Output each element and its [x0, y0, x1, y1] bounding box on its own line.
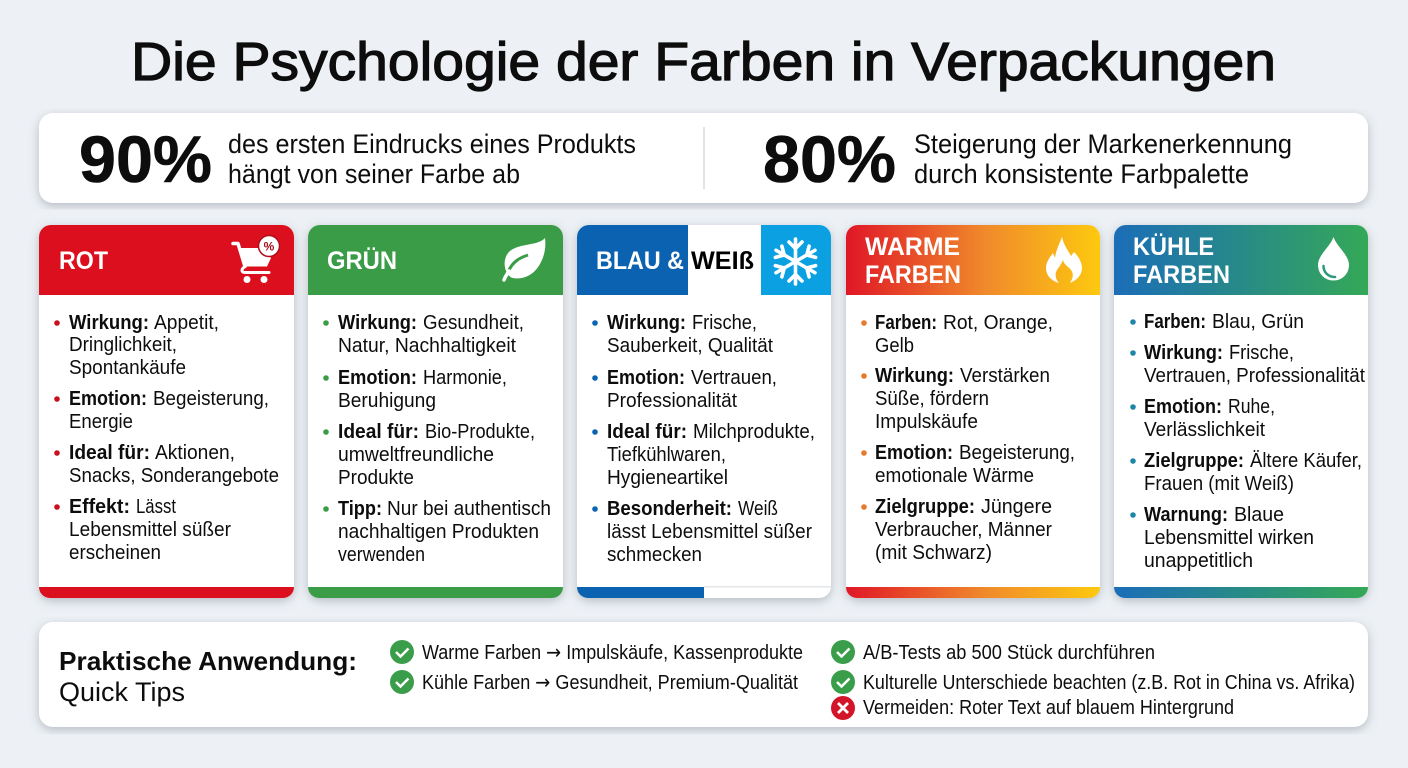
text: Grün details: Natur, Nachhaltigkeit — [338, 335, 516, 357]
warning: avoid red on blue: Vermeiden: Roter Text auf blauem Hintergrund — [863, 697, 1234, 719]
text: Kühle Farben details: unappetitlich — [1144, 550, 1253, 572]
text: Rot details: Spontankäufe — [69, 357, 186, 379]
text: Warme Farben details: Verstärken — [960, 365, 1050, 387]
header: Rot — [39, 225, 294, 295]
statistic: 80%: Steigerung der Markenerkennung — [914, 129, 1292, 159]
text: Grün details: Beruhigung — [338, 390, 436, 412]
text: Warme Farben details: (mit Schwarz) — [875, 542, 992, 564]
icon: water drop — [1318, 237, 1349, 280]
text: Grün details: Gesundheit, — [423, 312, 524, 334]
statistic: 90%: hängt von seiner Farbe ab — [228, 159, 520, 189]
panel: Warme Farben — [846, 225, 1100, 598]
text: Warme Farben details: Farben: — [875, 312, 937, 334]
text: Grün details: Produkte — [338, 467, 414, 489]
heading: Praktische Anwendung — [59, 646, 357, 707]
text: Rot details: Wirkung: — [69, 312, 149, 334]
text: Warme Farben details: Begeisterung, — [959, 442, 1075, 464]
text: Rot details: Snacks, Sonderangebote — [69, 465, 279, 487]
text: Grün details: verwenden — [338, 544, 425, 566]
text: Grün details: nachhaltigen Produkten — [338, 521, 539, 543]
text: Kühle Farben details: Blau, Grün — [1212, 311, 1304, 333]
statistic: 90%: des ersten Eindrucks eines Produkts — [228, 129, 636, 159]
text: Warme Farben details: Süße, fördern — [875, 388, 989, 410]
text: Grün details: Tipp: — [338, 498, 382, 520]
text: Grün details: Ideal für: — [338, 421, 419, 443]
icon: shopping cart with percent — [233, 236, 280, 283]
text: Blau und Weiß details: Besonderheit: — [607, 498, 732, 520]
text: Blau und Weiß details: Emotion: — [607, 367, 685, 389]
text: Warme Farben details: Jüngere — [981, 496, 1052, 518]
header: Grün: GRÜN — [327, 246, 397, 275]
text: Kühle Farben details: Frische, — [1229, 342, 1294, 364]
text: Kühle Farben details: Ältere Käufer, — [1250, 450, 1362, 472]
text: Grün details — [323, 312, 551, 566]
text: Rot details — [54, 312, 279, 564]
text: Kühle Farben details: Wirkung: — [1144, 342, 1223, 364]
heading: Praktische Anwendung: Praktische Anwendung: — [59, 646, 357, 676]
icon: shopping cart with percent: % — [264, 240, 275, 254]
header: Blau und Weiß: BLAU & — [596, 247, 684, 275]
text: Grün details: Emotion: — [338, 367, 417, 389]
icon: snowflake — [773, 239, 818, 284]
panel: Blau und Weiß — [577, 225, 831, 598]
text: Rot details: Begeisterung, — [153, 388, 269, 410]
statistic: 80%: durch konsistente Farbpalette — [914, 159, 1249, 189]
text: Rot details: Appetit, — [154, 312, 219, 334]
text: Kühle Farben details: Verlässlichkeit — [1144, 419, 1265, 441]
text: Kühle Farben details: Farben: — [1144, 311, 1206, 333]
text: Rot details: erscheinen — [69, 542, 161, 564]
text: Rot details: Ideal für: — [69, 442, 150, 464]
text: Warme Farben details: Wirkung: — [875, 365, 954, 387]
text: Blau und Weiß details: Hygieneartikel — [607, 467, 728, 489]
header: Kühle Farben: FARBEN — [1133, 261, 1230, 289]
tip: cool colours: Kühle Farben → Gesundheit, Premium-Qualität — [422, 670, 798, 694]
text: Rot details: Emotion: — [69, 388, 147, 410]
text: Warme Farben details: Zielgruppe: — [875, 496, 975, 518]
text: Grün details: Harmonie, — [423, 367, 507, 389]
header: Grün — [308, 225, 563, 295]
text: Kühle Farben details: Emotion: — [1144, 396, 1222, 418]
text: Blau und Weiß details: Frische, — [692, 312, 757, 334]
panel: practical tips — [39, 622, 1368, 727]
header: Warme Farben — [846, 225, 1100, 295]
text: Kühle Farben details — [1130, 311, 1365, 572]
text: Blau und Weiß details: schmecken — [607, 544, 702, 566]
statistic: 90% — [79, 122, 636, 196]
text: Kühle Farben details: Ruhe, — [1228, 396, 1275, 418]
text: Blau und Weiß details: Professionalität — [607, 390, 737, 412]
header: Kühle Farben: KÜHLE — [1133, 232, 1214, 261]
text: Grün details: Nur bei authentisch — [387, 498, 551, 520]
text: Kühle Farben details: Frauen (mit Weiß) — [1144, 473, 1294, 495]
tip: warm colours: Warme Farben → Impulskäufe, Kassenprodukte — [422, 640, 803, 664]
text: Rot details: Lebensmittel süßer — [69, 519, 231, 541]
text: Blau und Weiß details: lässt Lebensmittel süßer — [607, 521, 812, 543]
text: Blau und Weiß details: Vertrauen, — [691, 367, 777, 389]
text: Warme Farben details: Impulskäufe — [875, 411, 978, 433]
text: Rot details: Dringlichkeit, — [69, 334, 177, 356]
text: Kühle Farben details: Vertrauen, Professionalität — [1144, 365, 1365, 387]
panel: Kühle Farben — [1114, 225, 1368, 598]
text: Blau und Weiß details — [592, 312, 815, 566]
text: Kühle Farben details: Warnung: — [1144, 504, 1228, 526]
header: Blau und Weiß — [577, 225, 831, 295]
text: Blau und Weiß details: Ideal für: — [607, 421, 687, 443]
statistic: 90%: 90% — [79, 122, 212, 196]
text: Kühle Farben details: Zielgruppe: — [1144, 450, 1244, 472]
heading: Praktische Anwendung: Quick Tips — [59, 677, 185, 707]
text: Blau und Weiß details: Wirkung: — [607, 312, 686, 334]
text: Warme Farben details: Gelb — [875, 335, 914, 357]
statistic: 80% — [763, 122, 1292, 196]
text: Rot details: Lässt — [136, 496, 176, 518]
header: Warme Farben: FARBEN — [865, 261, 961, 289]
header: Warme Farben: WARME — [865, 233, 960, 261]
text: Rot details: Energie — [69, 411, 133, 433]
text: Warme Farben details: Verbraucher, Männer — [875, 519, 1052, 541]
text: Warme Farben details: Emotion: — [875, 442, 953, 464]
text: Rot details: Effekt: — [69, 496, 130, 518]
text: Blau und Weiß details: Tiefkühlwaren, — [607, 444, 726, 466]
text: Grün details: Bio-Produkte, — [425, 421, 535, 443]
panel: key statistics — [39, 113, 1368, 203]
text: Blau und Weiß details: Weiß — [738, 498, 778, 520]
text: Blau und Weiß details: Milchprodukte, — [693, 421, 815, 443]
text: Warme Farben details — [861, 312, 1075, 564]
header: Rot: ROT — [59, 247, 108, 275]
tip: cultural differences: Kulturelle Unterschiede beachten (z.B. Rot in China vs. Afrika) — [863, 672, 1355, 694]
text: Warme Farben details: emotionale Wärme — [875, 465, 1034, 487]
statistic: 80%: 80% — [763, 122, 896, 196]
text: Blau und Weiß details: Sauberkeit, Qualität — [607, 335, 773, 357]
text: Grün details: umweltfreundliche — [338, 444, 494, 466]
text: Rot details: Aktionen, — [155, 442, 235, 464]
icon: flame — [1046, 237, 1082, 283]
panel: Rot — [39, 225, 294, 598]
panel: Grün — [308, 225, 563, 598]
text: Kühle Farben details: Blaue — [1234, 504, 1284, 526]
text: Grün details: Wirkung: — [338, 312, 417, 334]
header: Kühle Farben — [1114, 225, 1368, 295]
text: Kühle Farben details: Lebensmittel wirken — [1144, 527, 1314, 549]
header: Blau und Weiß: WEIß — [691, 247, 754, 275]
tip: A/B tests: A/B-Tests ab 500 Stück durchführen — [863, 642, 1155, 664]
title: Die Psychologie der Farben in Verpackungen — [131, 32, 1276, 92]
icon: leaf — [504, 238, 545, 280]
text: Warme Farben details: Rot, Orange, — [943, 312, 1053, 334]
